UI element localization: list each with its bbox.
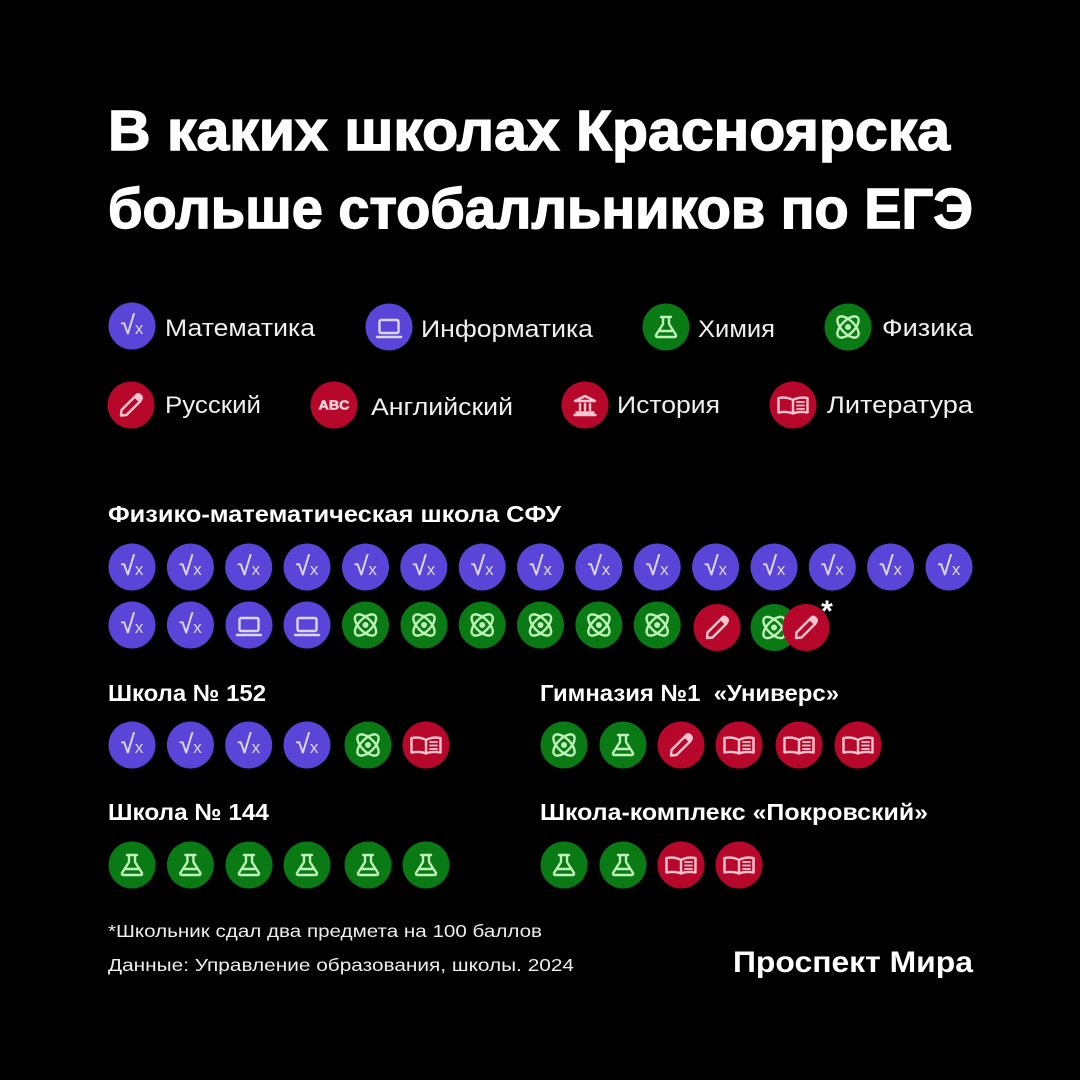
- icons row: Pokrovsky school: [540, 842, 762, 888]
- icons row: physics-math school, line 1: √x: [354, 551, 377, 581]
- legend item: английский: ABC: [318, 398, 350, 412]
- icons row: physics-math school, line 1: √x: [471, 551, 494, 581]
- heading: Гимназия №1 «Универс»: Гимназия №1 «Универс»: [540, 680, 839, 706]
- icons row: gymnasium 1: [540, 722, 882, 768]
- icons row: physics-math school, line 1: √x: [121, 551, 144, 581]
- icons row: physics-math school, line 1: √x: [296, 551, 319, 581]
- heading: Школа № 144: Школа № 144: [108, 799, 269, 825]
- icons row: school 152: √x: [296, 729, 319, 759]
- icons row: physics-math school, line 1: √x: [821, 551, 844, 581]
- legend item: химия: [642, 304, 775, 350]
- heading: Школа № 152: Школа № 152: [108, 680, 266, 706]
- icons row: physics-math school, line 1: √x: [529, 551, 552, 581]
- icons row: physics-math school, line 2: √x: [179, 609, 202, 639]
- legend item: информатика: Информатика: [421, 316, 594, 343]
- icons row: physics-math school, line 2: √x: [121, 609, 144, 639]
- heading: Школа-комплекс «Покровский»: Школа-комплекс «Покровский»: [540, 799, 928, 825]
- icons row: physics-math school, line 1: √x: [412, 551, 436, 581]
- icons row: physics-math school, line 1: [108, 544, 972, 590]
- title: больше стобалльников по ЕГЭ: [108, 177, 973, 241]
- legend item: математика: [108, 302, 316, 350]
- icons row: physics-math school, line 1: √x: [938, 551, 961, 581]
- icons row: physics-math school, line 1: √x: [704, 551, 727, 581]
- icons row: school 144: [108, 842, 450, 888]
- legend item: русский: Русский: [165, 392, 261, 419]
- title: В каких школах Красноярска: [108, 99, 951, 163]
- icons row: physics-math school, line 1: √x: [879, 551, 902, 581]
- legend item: русский: [108, 382, 261, 428]
- icons row: school 152: √x: [237, 729, 261, 759]
- legend: [108, 302, 974, 428]
- icons row: school 152: [108, 722, 450, 768]
- legend item: математика: Математика: [165, 315, 316, 342]
- heading: Физико-математическая школа СФУ: Физико-математическая школа СФУ: [108, 501, 561, 527]
- legend item: история: История: [617, 392, 720, 419]
- title: [108, 99, 973, 241]
- legend item: химия: Химия: [698, 316, 775, 343]
- icons row: physics-math school, line 1: √x: [588, 551, 611, 581]
- footnote: *Школьник сдал два предмета на 100 баллов: [108, 921, 542, 941]
- footnote asterisk: *: [821, 595, 833, 628]
- brand logo text: Проспект Мира: [733, 946, 973, 979]
- icons row: school 152: √x: [179, 729, 202, 759]
- legend item: математика: √x: [121, 310, 144, 340]
- icons row: physics-math school, line 1: √x: [646, 551, 669, 581]
- legend item: физика: Физика: [882, 315, 974, 342]
- legend item: английский: [310, 382, 513, 428]
- icons row: physics-math school, line 1: √x: [179, 551, 202, 581]
- icons row: physics-math school, line 1: √x: [237, 551, 261, 581]
- data source: Данные: Управление образования, школы. 2024: [108, 955, 574, 975]
- icons row: physics-math school, line 1: √x: [763, 551, 786, 581]
- icons row: school 152: √x: [121, 729, 144, 759]
- legend item: литература: Литература: [827, 392, 974, 419]
- legend item: литература: [770, 382, 974, 428]
- legend item: английский: Английский: [371, 394, 513, 421]
- legend item: история: [562, 382, 720, 428]
- legend item: информатика: [366, 304, 594, 350]
- icons row: physics-math school, line 2: [108, 595, 833, 651]
- legend item: физика: [824, 304, 974, 350]
